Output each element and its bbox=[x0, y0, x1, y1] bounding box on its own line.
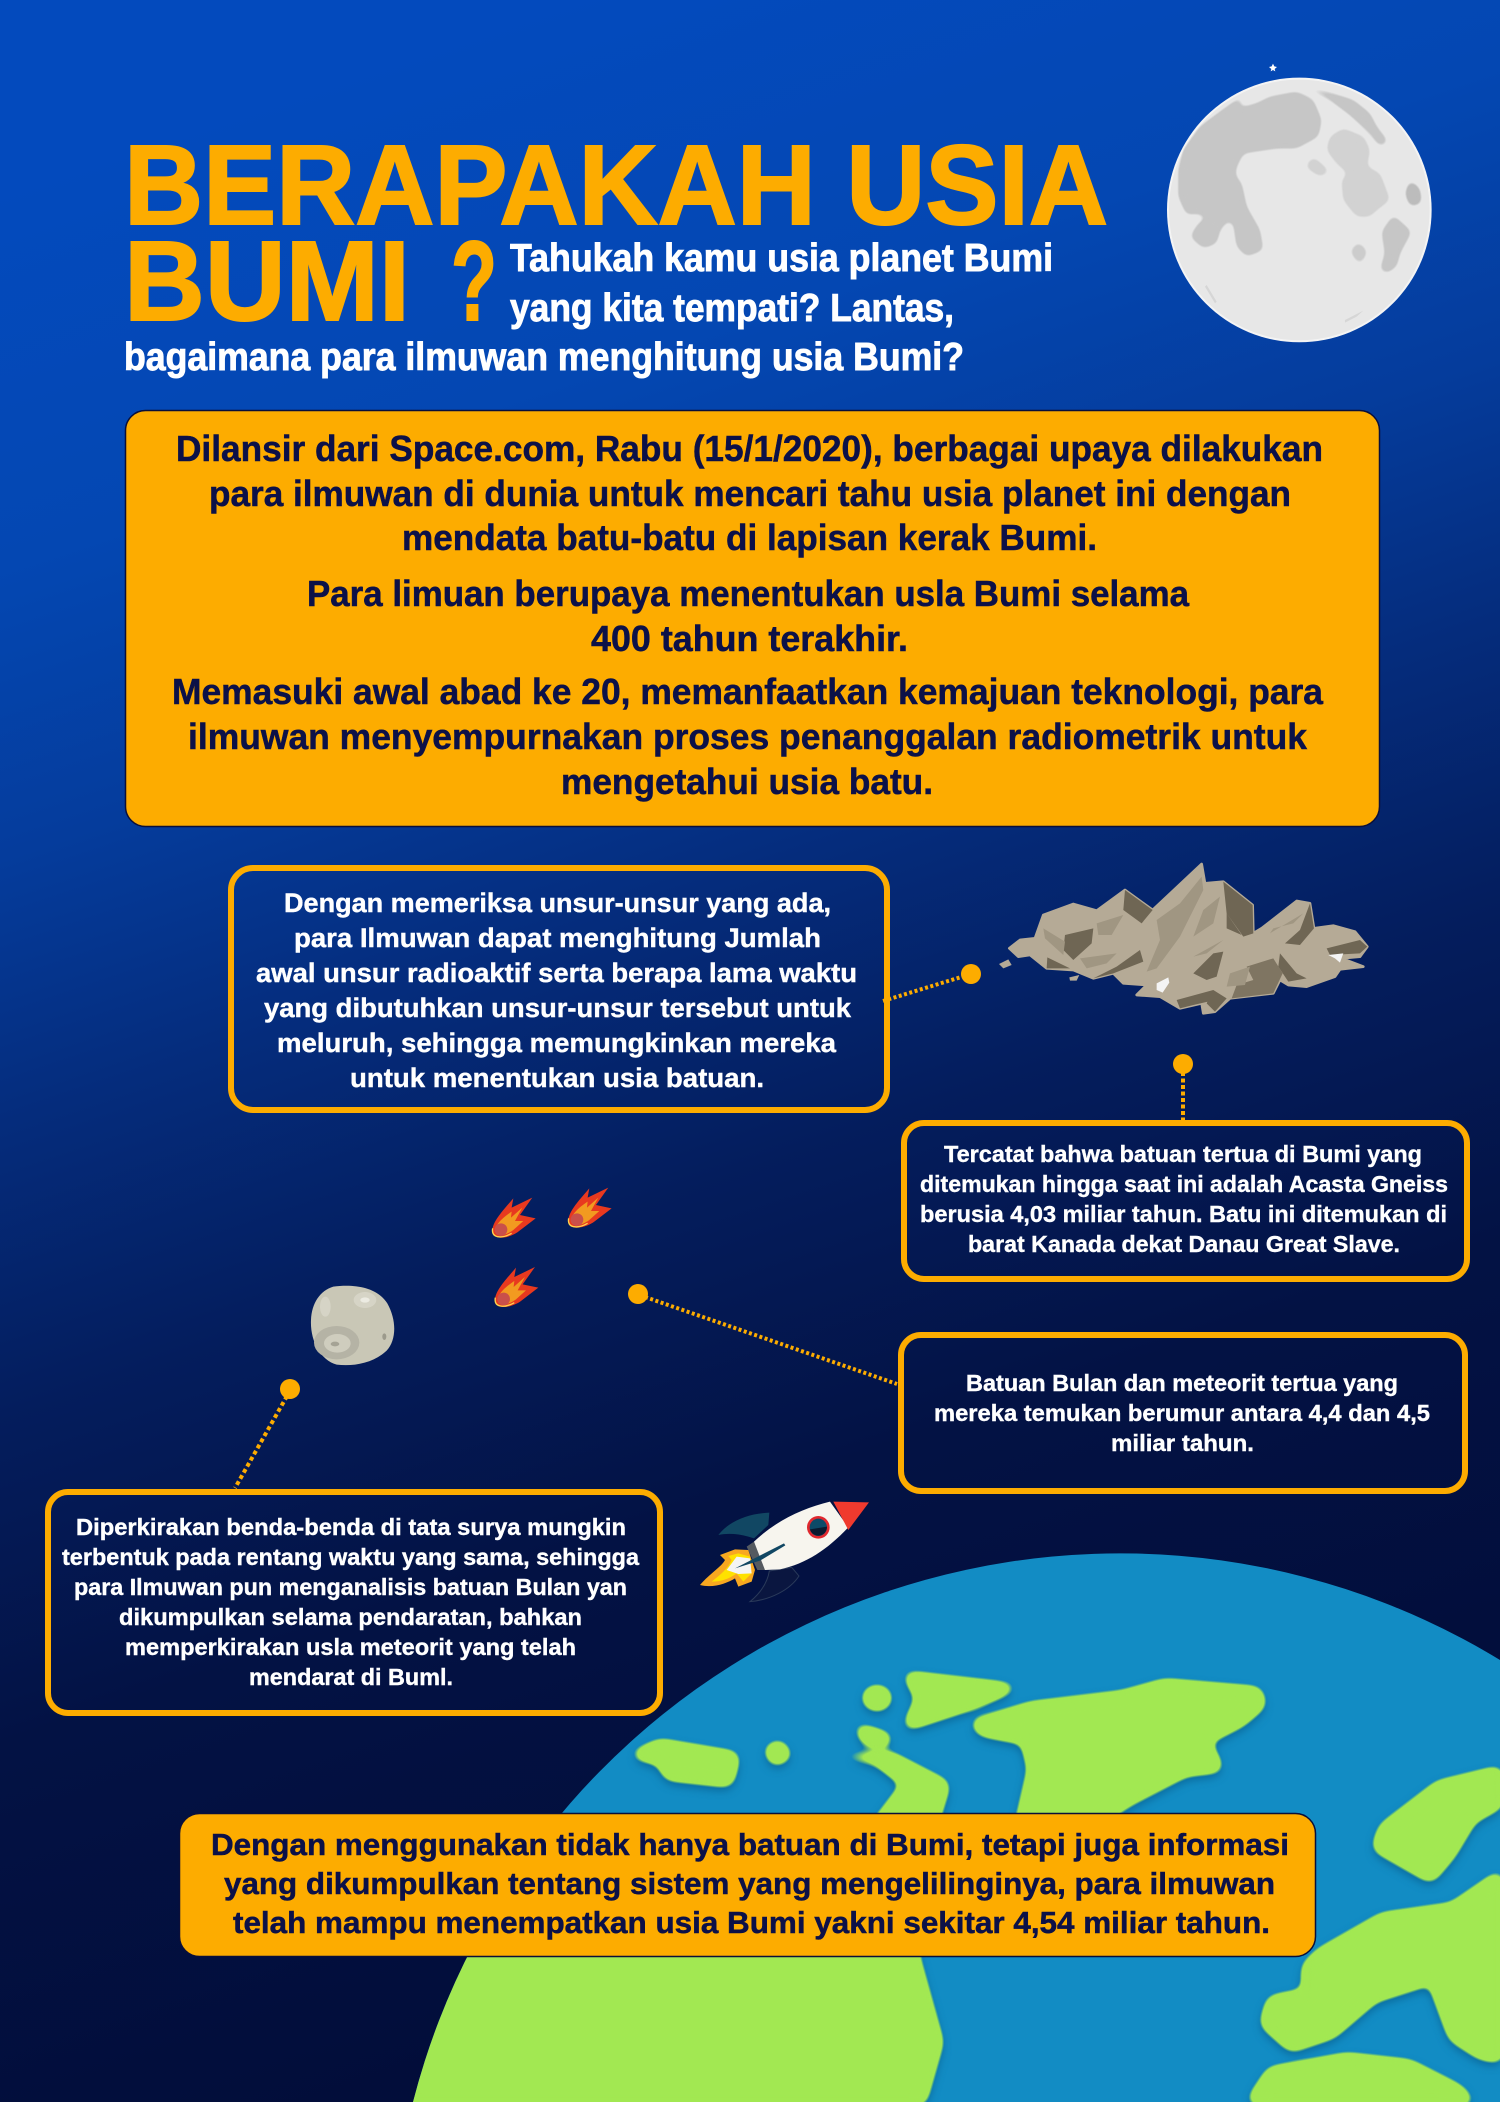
illustration: meteor 2 bbox=[568, 1188, 612, 1228]
illustration: rocket bbox=[700, 1502, 869, 1602]
panel: intro: Para limuan berupaya menentukan usla Bumi selama bbox=[307, 573, 1190, 614]
arrow: asteroid to box bbox=[235, 1379, 300, 1488]
callout: radioactive elements: meluruh, sehingga memungkinkan mereka bbox=[277, 1028, 836, 1058]
panel: intro: Dilansir dari Space.com, Rabu (15/1/2020), berbagai upaya dilakukan bbox=[176, 428, 1323, 469]
arrow: rocks to acasta box bbox=[1173, 1054, 1193, 1120]
illustration: meteor 1 bbox=[492, 1198, 536, 1238]
illustration: meteor 3 bbox=[495, 1267, 538, 1307]
title: ? bbox=[451, 218, 497, 344]
title: BERAPAKAH USIA bbox=[124, 122, 1108, 248]
panel: intro bbox=[126, 410, 1380, 826]
callout: solar system: dikumpulkan selama pendaratan, bahkan bbox=[119, 1604, 582, 1630]
panel: intro: para ilmuwan di dunia untuk mencari tahu usia planet ini dengan bbox=[209, 473, 1291, 514]
panel: intro: 400 tahun terakhir. bbox=[591, 618, 908, 659]
callout: solar system bbox=[48, 1492, 660, 1713]
callout: oldest rock: ditemukan hingga saat ini adalah Acasta Gneiss bbox=[920, 1171, 1448, 1197]
subtitle bbox=[124, 237, 1053, 379]
illustration: moon bbox=[1167, 64, 1432, 342]
title: BUMI bbox=[124, 218, 410, 344]
panel: intro: ilmuwan menyempurnakan proses penanggalan radiometrik untuk bbox=[188, 716, 1308, 757]
callout: oldest rock: barat Kanada dekat Danau Great Slave. bbox=[968, 1231, 1400, 1257]
subtitle: bagaimana para ilmuwan menghitung usia Bumi? bbox=[124, 336, 964, 379]
callout: oldest rock: Tercatat bahwa batuan tertua di Bumi yang bbox=[944, 1141, 1422, 1167]
callout: radioactive elements: Dengan memeriksa unsur-unsur yang ada, bbox=[284, 888, 831, 918]
callout: oldest rock bbox=[904, 1123, 1467, 1279]
callout: moon rocks and meteorites: Batuan Bulan dan meteorit tertua yang bbox=[966, 1370, 1398, 1396]
panel: conclusion: Dengan menggunakan tidak hanya batuan di Bumi, tetapi juga informasi bbox=[211, 1827, 1289, 1862]
panel: conclusion bbox=[180, 1814, 1316, 1956]
illustration: asteroid bbox=[311, 1286, 394, 1365]
panel: intro: Memasuki awal abad ke 20, memanfaatkan kemajuan teknologi, para bbox=[172, 671, 1324, 712]
subtitle: yang kita tempati? Lantas, bbox=[510, 287, 954, 330]
arrow: box to rocks bbox=[883, 964, 981, 1001]
callout: solar system: Diperkirakan benda-benda di tata surya mungkin bbox=[76, 1514, 626, 1540]
callout: radioactive elements: untuk menentukan usia batuan. bbox=[350, 1063, 764, 1093]
callout: solar system: mendarat di Buml. bbox=[249, 1664, 453, 1690]
illustration: earth bbox=[400, 1553, 1500, 2102]
panel: conclusion: yang dikumpulkan tentang sistem yang mengelilinginya, para ilmuwan bbox=[224, 1866, 1275, 1901]
callout: radioactive elements: awal unsur radioaktif serta berapa lama waktu bbox=[256, 958, 857, 988]
callout: radioactive elements: para Ilmuwan dapat menghitung Jumlah bbox=[294, 923, 821, 953]
illustration: rocks bbox=[999, 864, 1367, 1013]
panel: conclusion: telah mampu menempatkan usia Bumi yakni sekitar 4,54 miliar tahun. bbox=[233, 1905, 1270, 1940]
panel: intro: mengetahui usia batu. bbox=[561, 761, 933, 802]
callout: solar system: terbentuk pada rentang waktu yang sama, sehingga bbox=[62, 1544, 640, 1570]
arrow: meteors to box bbox=[628, 1284, 897, 1384]
callout: radioactive elements: yang dibutuhkan unsur-unsur tersebut untuk bbox=[264, 993, 851, 1023]
callout: oldest rock: berusia 4,03 miliar tahun. Batu ini ditemukan di bbox=[920, 1201, 1447, 1227]
callout: radioactive elements bbox=[231, 868, 887, 1110]
callout: solar system: para Ilmuwan pun menganalisis batuan Bulan yan bbox=[74, 1574, 627, 1600]
title bbox=[124, 122, 1108, 344]
panel: intro: mendata batu-batu di lapisan kerak Bumi. bbox=[402, 517, 1097, 558]
callout: moon rocks and meteorites: mereka temukan berumur antara 4,4 dan 4,5 bbox=[934, 1400, 1430, 1426]
callout: moon rocks and meteorites bbox=[901, 1335, 1465, 1491]
callout: moon rocks and meteorites: miliar tahun. bbox=[1111, 1430, 1254, 1456]
callout: solar system: memperkirakan usla meteorit yang telah bbox=[125, 1634, 576, 1660]
subtitle: Tahukah kamu usia planet Bumi bbox=[510, 237, 1053, 280]
